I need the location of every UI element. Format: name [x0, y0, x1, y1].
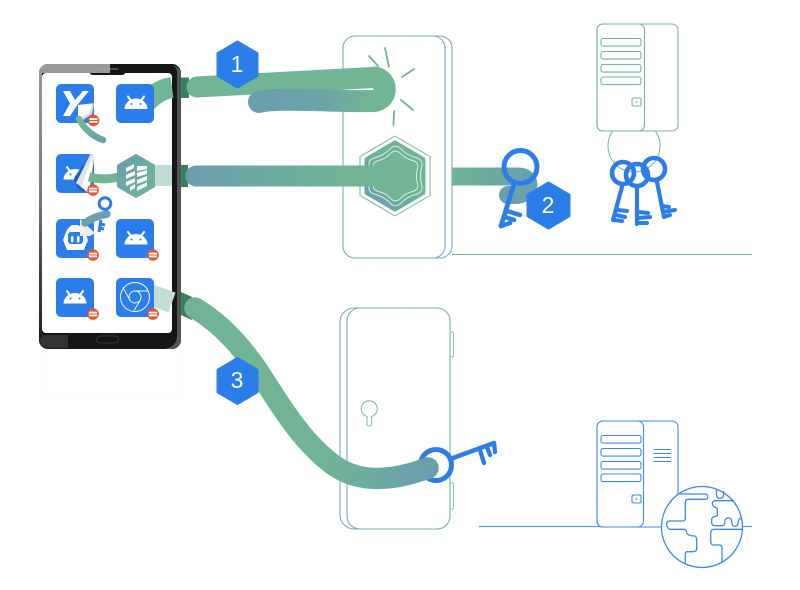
phone screen	[42, 73, 172, 333]
door 2 keyhole	[361, 401, 377, 426]
stroke 1 inside phone	[138, 88, 172, 112]
stroke 2 light section	[150, 165, 172, 186]
peeled corner: app two	[74, 153, 120, 193]
door 2 hinges	[450, 332, 454, 509]
server top case	[597, 24, 678, 131]
stroke 1 top band	[197, 78, 373, 87]
server top button	[632, 98, 641, 106]
large key	[501, 150, 537, 226]
door 2 front panel	[347, 308, 450, 529]
lock wavy outlines	[369, 146, 422, 206]
hexagonal lock	[360, 136, 430, 216]
hexagon badge 2: 2	[542, 192, 554, 218]
key bunch	[612, 158, 675, 224]
server bottom case	[597, 421, 678, 527]
peeled corner: app one	[78, 103, 103, 140]
door 2	[340, 308, 454, 529]
server top	[597, 24, 678, 131]
stroke 2 hexagon icon	[118, 155, 154, 197]
stroke 2 seam shadow	[181, 165, 188, 187]
app icon: Anthos	[56, 84, 94, 123]
badge: app four	[147, 249, 159, 261]
stroke 1 return loop	[259, 78, 385, 102]
phone right edge	[165, 66, 181, 349]
hexagon badge 1: 1	[231, 51, 243, 77]
badge: app six	[147, 308, 159, 320]
stroke 3 seam shadow	[181, 292, 192, 320]
stroke 3 light section	[150, 294, 172, 302]
hexagon badge 1	[218, 42, 257, 87]
server top drives	[601, 38, 641, 85]
globe	[662, 486, 742, 568]
phone lit frame	[39, 64, 110, 335]
stroke 3	[195, 308, 428, 478]
globe continents	[667, 494, 708, 563]
badge: app five	[87, 308, 99, 320]
server bottom drives	[601, 436, 641, 482]
server ring	[608, 120, 660, 172]
phone	[39, 64, 181, 349]
hexagon badge 2	[528, 183, 569, 228]
lock outline	[360, 136, 430, 216]
phone body	[39, 64, 181, 349]
door key	[420, 443, 495, 480]
hexagon badge 3: 3	[231, 367, 243, 393]
door 1 back panel	[432, 36, 452, 258]
lock fill	[367, 143, 423, 209]
phone notch	[90, 73, 125, 75]
badge: app three	[87, 249, 99, 261]
stroke 2 right segment	[452, 176, 528, 195]
baseline: lower shelf	[479, 526, 752, 528]
phone chin shading	[40, 335, 68, 348]
stroke 2 end cap	[499, 186, 517, 204]
badge: app one	[88, 115, 99, 126]
server top front	[597, 24, 644, 131]
phone speaker	[97, 68, 118, 70]
server bottom vents	[654, 450, 671, 462]
door 1 front panel	[343, 36, 445, 258]
app icon: Studio	[56, 219, 94, 258]
hexagon badge 3	[218, 358, 257, 404]
app icon: Chrome	[116, 278, 154, 317]
peeled corner: app three with small key	[80, 198, 111, 236]
app icon: Android row four	[56, 278, 94, 317]
globe outline	[662, 486, 742, 568]
door 1	[343, 36, 452, 258]
server bottom button	[632, 495, 641, 503]
phone reflection	[41, 349, 177, 398]
app icon: Android row two	[56, 154, 94, 193]
badge: app two	[87, 184, 99, 196]
door 2 back panel	[340, 308, 362, 529]
light rays	[369, 48, 414, 125]
phone home button	[96, 336, 118, 343]
app icon: Android row three	[116, 219, 154, 258]
stroke 1 seam shadow	[181, 78, 189, 98]
app icon: Android top right	[116, 84, 154, 123]
stroke 2	[196, 166, 392, 186]
server bottom front	[597, 421, 644, 527]
server bottom	[597, 421, 678, 527]
stroke 1 return end cap	[248, 91, 270, 113]
baseline: upper shelf	[452, 254, 752, 256]
